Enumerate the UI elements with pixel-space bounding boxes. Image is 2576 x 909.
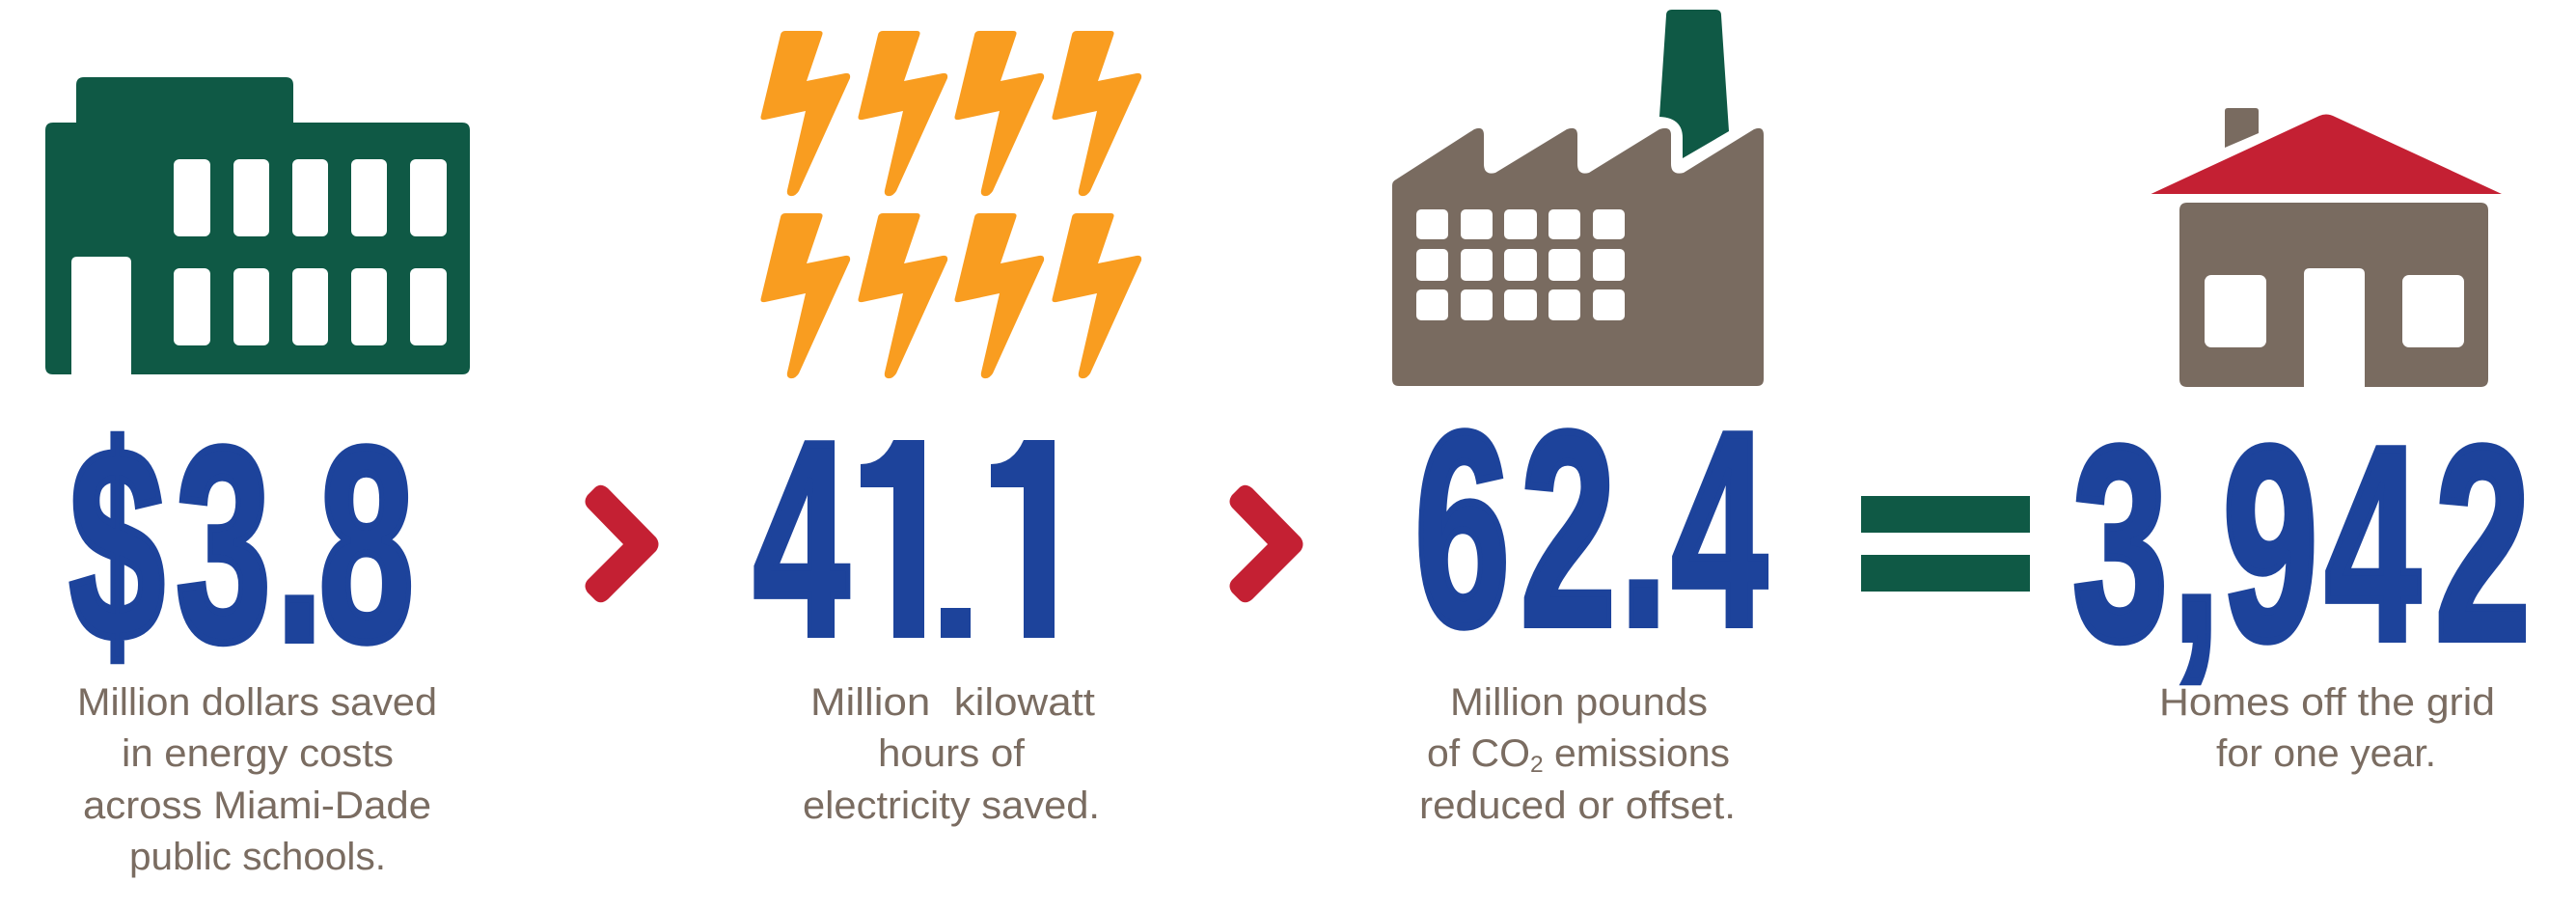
text: homes caption: for one year. bbox=[2216, 732, 2436, 775]
equals sign bbox=[1861, 496, 2030, 592]
text: dollars caption: Million dollars saved bbox=[77, 681, 437, 724]
panel: CO2 reduced bbox=[1392, 10, 1768, 827]
arrow: chevron one bbox=[585, 485, 658, 602]
house body bbox=[2179, 203, 2488, 387]
factory body bbox=[1392, 128, 1764, 386]
text: dollars caption: in energy costs bbox=[122, 732, 394, 775]
text: kilowatt caption: Million kilowatt bbox=[810, 681, 1095, 724]
text: kilowatt caption: hours of bbox=[878, 732, 1026, 775]
text: dollars caption bbox=[77, 681, 437, 878]
panel: dollars saved bbox=[45, 77, 470, 878]
text: kilowatt caption: electricity saved. bbox=[803, 785, 1100, 827]
text: CO2 caption: Million pounds bbox=[1450, 681, 1708, 724]
house roof bbox=[2151, 114, 2502, 194]
number: 41.1: 41.1 bbox=[754, 386, 1083, 693]
panel: kilowatt hours saved bbox=[754, 31, 1141, 827]
text: homes caption: Homes off the grid bbox=[2159, 681, 2495, 724]
text: CO2 caption bbox=[1419, 681, 1736, 827]
number: 62.4: 62.4 bbox=[1414, 376, 1768, 683]
icon: house bbox=[2151, 108, 2502, 387]
text: kilowatt caption bbox=[803, 681, 1100, 827]
text: CO2 caption: reduced or offset. bbox=[1419, 785, 1736, 827]
text: homes caption bbox=[2159, 681, 2495, 775]
arrow: chevron two bbox=[1229, 485, 1302, 602]
text: CO2 caption: 2 bbox=[1530, 752, 1544, 778]
house chimney bbox=[2225, 108, 2259, 148]
text: CO2 caption: emissions bbox=[1544, 732, 1730, 775]
number: 3,942: 3,942 bbox=[2072, 391, 2531, 698]
panel: homes off the grid bbox=[2072, 108, 2531, 775]
icon: eight lightning bolts bbox=[760, 31, 1141, 378]
text: dollars caption: public schools. bbox=[129, 836, 386, 878]
text: CO2 caption: of CO bbox=[1427, 732, 1527, 775]
icon: smokestack bbox=[1659, 10, 1729, 158]
number: $3.8: $3.8 bbox=[69, 392, 414, 699]
icon: factory bbox=[1392, 10, 1764, 386]
text: dollars caption: across Miami-Dade bbox=[83, 785, 431, 827]
icon: school building bbox=[45, 77, 470, 374]
